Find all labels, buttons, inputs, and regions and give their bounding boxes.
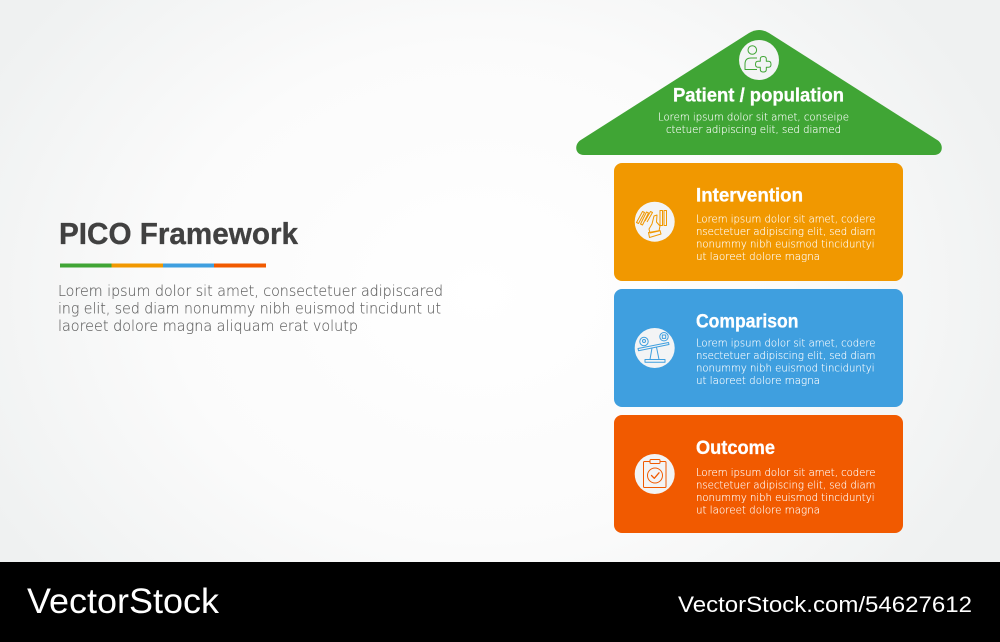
intro text: Lorem ipsum dolor sit amet, consectetuer adipiscared [58, 282, 443, 300]
intro text [58, 282, 443, 335]
panel: comparison [614, 289, 903, 407]
intro text: laoreet dolore magna aliquam erat volutp [58, 317, 358, 335]
panel: patient / population arrow head [576, 30, 942, 155]
body text: nonummy nibh euismod tinciduntyi [696, 491, 874, 504]
icon: clipboard with check [635, 454, 675, 494]
body text: nonummy nibh euismod tinciduntyi [696, 238, 874, 250]
icon: patient with plus [739, 40, 779, 80]
arrow head shape [576, 30, 942, 155]
body text [696, 466, 876, 516]
body text: Lorem ipsum dolor sit amet, codere [696, 212, 876, 225]
body text: Lorem ipsum dolor sit amet, codere [696, 336, 876, 350]
panel: intervention [614, 163, 903, 281]
body text: ut laoreet dolore magna [696, 504, 820, 516]
body text [696, 336, 876, 387]
icon: seesaw scale [635, 328, 675, 368]
body text: nsectetuer adipiscing elit, sed diam [696, 349, 876, 362]
body text: ut laoreet dolore magna [696, 250, 820, 263]
body text [696, 212, 876, 263]
heading: Intervention [696, 186, 803, 206]
footer band [0, 562, 1000, 642]
body text: nsectetuer adipiscing elit, sed diam [696, 478, 876, 492]
body text: nonummy nibh euismod tinciduntyi [696, 362, 874, 374]
body text: ut laoreet dolore magna [696, 374, 820, 387]
title: PICO Framework [59, 216, 299, 251]
intro text: ing elit, sed diam nonummy nibh euismod tincidunt ut [58, 300, 441, 318]
body text: ctetuer adipiscing elit, sed diamed [666, 123, 841, 136]
heading: Outcome [696, 438, 775, 459]
panel: outcome [614, 415, 903, 533]
body text: Lorem ipsum dolor sit amet, conseipe [658, 110, 849, 124]
left intro panel [58, 216, 443, 335]
footer logo text: VectorStock [27, 582, 220, 621]
card [614, 163, 903, 281]
heading: Patient / population [673, 86, 844, 106]
card [614, 415, 903, 533]
heading: Comparison [696, 312, 798, 332]
card [614, 289, 903, 407]
colored divider bar [60, 264, 266, 268]
body text: nsectetuer adipiscing elit, sed diam [696, 225, 876, 238]
body text [658, 110, 849, 136]
body text: Lorem ipsum dolor sit amet, codere [696, 466, 876, 479]
footer image id: VectorStock.com/54627612 [678, 592, 972, 617]
icon: hand with dominoes [635, 202, 675, 242]
